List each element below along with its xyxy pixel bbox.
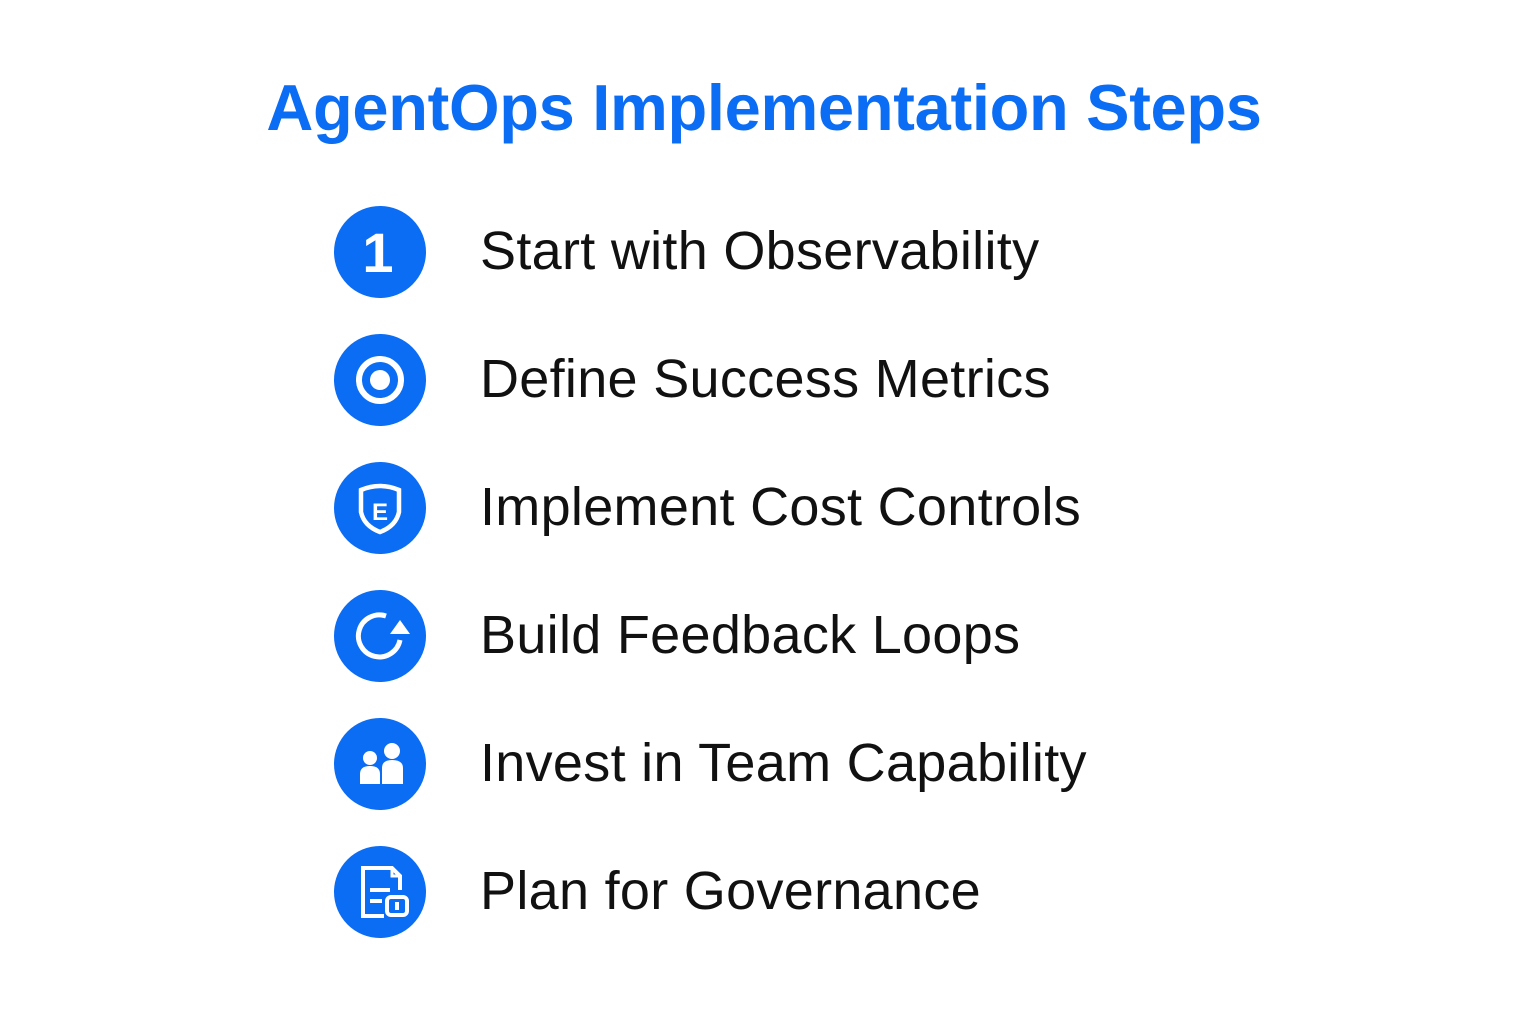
icon: refresh [334,590,426,682]
label 1: Start with Observability [480,221,1039,281]
icon: number 1 [334,206,426,298]
label 6: Plan for Governance [480,861,981,921]
step 1 [334,206,1039,298]
label 5: Invest in Team Capability [480,733,1087,793]
icon: document [334,846,426,938]
step 4 [334,590,1020,682]
icon: shield [334,462,426,554]
label 3: Implement Cost Controls [480,477,1081,537]
step 3 [334,462,1081,554]
title: AgentOps Implementation Steps [266,71,1262,144]
label 2: Define Success Metrics [480,349,1051,409]
step 2 [334,334,1051,426]
step 6 [334,846,981,938]
icon: shield: E [372,499,388,526]
icon: number 1: 1 [362,221,394,284]
icon: target [334,334,426,426]
label 4: Build Feedback Loops [480,605,1020,665]
icon: team [334,718,426,810]
step 5 [334,718,1087,810]
